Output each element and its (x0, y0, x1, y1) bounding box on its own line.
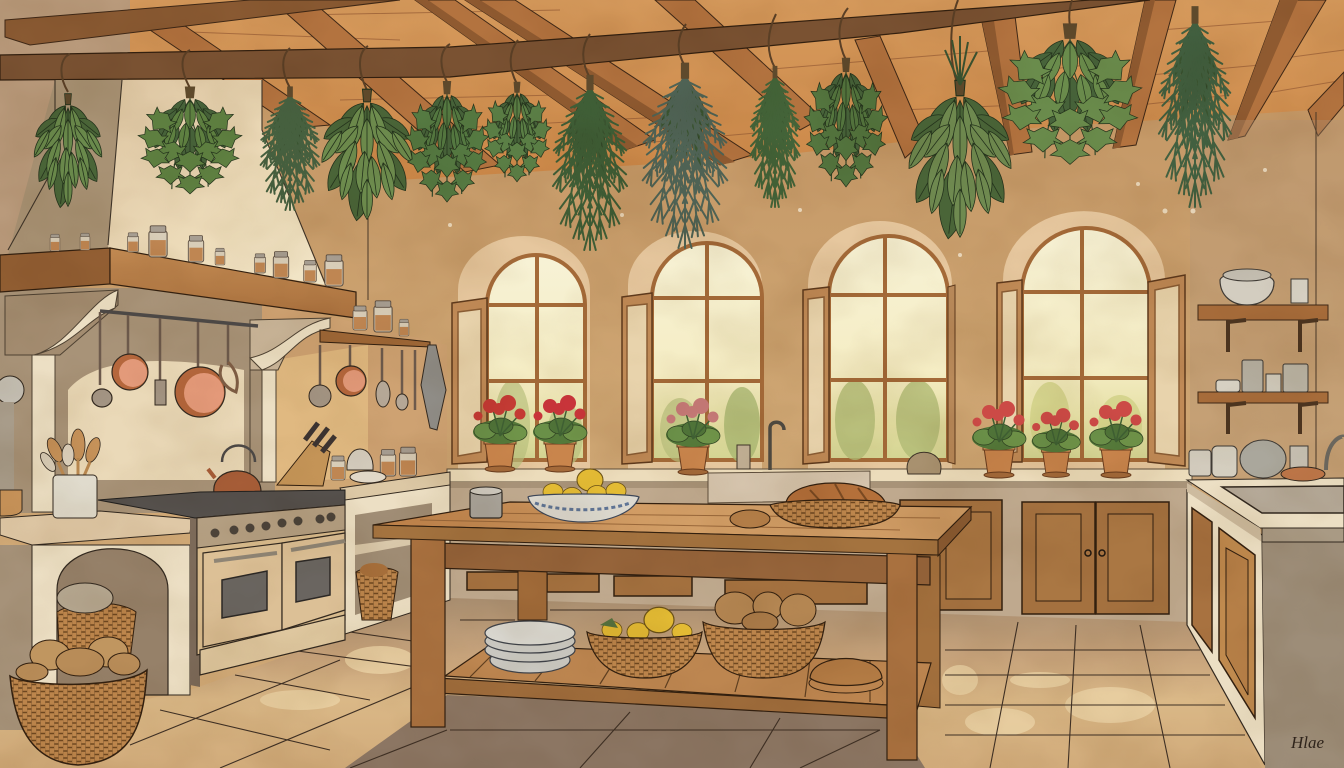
plate stack (485, 621, 575, 673)
floor (0, 598, 1262, 768)
left counter with niche (0, 511, 192, 730)
herb 4 (317, 89, 417, 222)
herb 2 (135, 86, 245, 194)
hanging herb bunches (31, 0, 1236, 250)
window 3 (803, 221, 955, 470)
basket in niche (57, 603, 136, 660)
signature: Hlae (1290, 733, 1324, 752)
stand mixer at left edge (0, 376, 24, 516)
herb 13 (1154, 6, 1236, 207)
left oven door (203, 543, 282, 647)
herb 10 (801, 58, 891, 187)
back counter and cabinets (447, 422, 1192, 627)
herb 5 (402, 81, 492, 202)
right wall shelves (1198, 269, 1328, 434)
left alcove wall (0, 288, 447, 513)
table objects (470, 469, 900, 693)
side counter with shelf (331, 447, 450, 635)
jars on mantel (50, 226, 343, 286)
sink (708, 471, 870, 503)
potted geraniums (473, 395, 1143, 478)
hanging pots and utensils left (92, 311, 258, 417)
island shadow (345, 695, 925, 768)
tan side wall (262, 300, 447, 482)
window 2 (622, 231, 762, 470)
small bread (730, 510, 770, 528)
apron (435, 543, 930, 585)
herb 12 (993, 23, 1147, 164)
windows (452, 211, 1185, 470)
wall speckles (448, 168, 1267, 262)
herb 3 (257, 86, 323, 210)
cabinet doors (467, 500, 1169, 614)
bread rolls basket (703, 592, 825, 678)
ceiling rafters (150, 0, 1344, 172)
right sink (1222, 486, 1344, 513)
lower shelf (445, 645, 931, 710)
table top (373, 502, 971, 540)
front legs (411, 538, 445, 727)
herb 7 (548, 75, 632, 250)
large bread basket on floor (10, 637, 147, 765)
range stove (98, 490, 345, 687)
lemon bowl (528, 469, 639, 522)
twine loops (61, 0, 1072, 92)
knife block (277, 423, 335, 486)
right pillar (250, 370, 275, 482)
back legs (518, 568, 547, 620)
left pillar (32, 355, 55, 512)
window sill objects (737, 440, 1308, 478)
small tin cup (470, 487, 502, 518)
pale floor washes (260, 646, 1155, 736)
mantel shelf (0, 248, 356, 318)
herb 9 (747, 66, 803, 207)
right counter and cabinets (1187, 437, 1344, 768)
wall corner and shading (368, 112, 1344, 480)
left wall patch (0, 0, 130, 270)
tea towel (421, 345, 446, 430)
bread basket (770, 483, 900, 528)
wooden ceiling (5, 0, 1344, 182)
right oven door (282, 533, 345, 630)
utensil crock (38, 429, 103, 518)
herb 8 (637, 63, 733, 248)
stem fan above bunch (945, 36, 977, 85)
basket under side counter (356, 568, 398, 620)
left hood and chimney (8, 80, 325, 285)
main hanging beam (0, 0, 1150, 80)
small shelf right of hood (320, 301, 430, 347)
lower shelf with jars (1198, 360, 1328, 434)
upper left beam (5, 0, 400, 45)
hanging pots and utensils right (309, 345, 446, 430)
lemon basket (587, 607, 702, 678)
upper shelf with tureen (1198, 269, 1328, 352)
teapot (907, 452, 941, 474)
window 1 (452, 236, 590, 470)
chimney side face (8, 80, 122, 255)
side cabinet doors (1192, 508, 1212, 652)
herb 6 (480, 82, 554, 182)
shelf loaf (809, 658, 883, 693)
copper kettle (208, 446, 261, 493)
herb 11 (904, 80, 1016, 241)
window 4 (997, 211, 1185, 470)
island table (373, 502, 971, 760)
chimney front face (108, 80, 325, 285)
base drawer (200, 615, 345, 675)
herb 1 (31, 94, 105, 209)
